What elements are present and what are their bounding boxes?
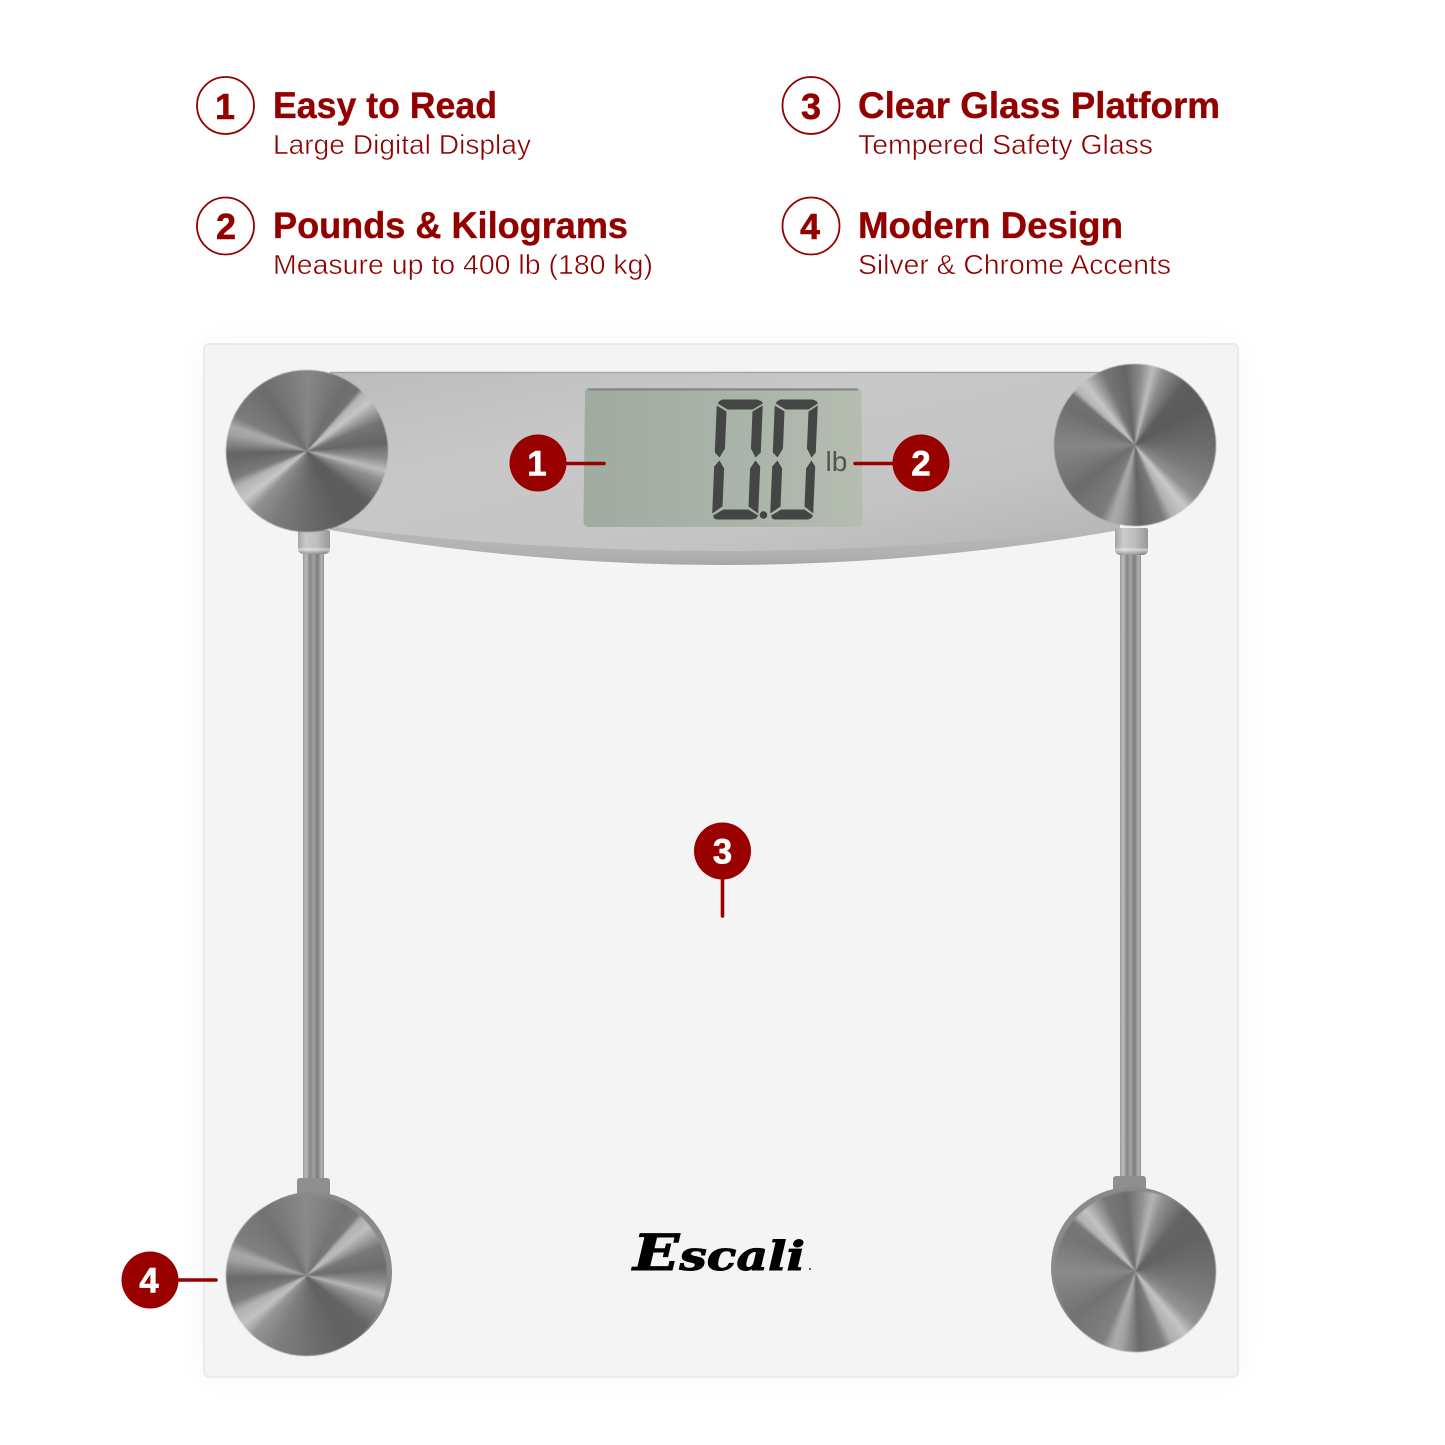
legend item 1: Easy to Read: Large Digital Display: [273, 129, 531, 160]
callout 1: [510, 434, 604, 492]
callout 4: [122, 1252, 216, 1308]
callout 3: 3: [713, 832, 732, 872]
legend item 1: Easy to Read: 1: [215, 86, 235, 127]
legend item 2: Pounds & Kilograms: 2: [216, 206, 236, 247]
legend item 2: Pounds & Kilograms: Pounds & Kilograms: [273, 205, 628, 246]
legend item 4: Modern Design: 4: [800, 206, 820, 247]
foot: bottom right: [1051, 1187, 1212, 1348]
panel: silver display housing: [330, 372, 1120, 565]
callout 1: 1: [527, 444, 547, 484]
bottom-left rod collar: [297, 1178, 330, 1196]
legend item 2: Pounds & Kilograms: Measure up to 400 lb (180 kg): [273, 249, 653, 280]
callout 2: [855, 434, 950, 492]
legend item 2: Pounds & Kilograms: [197, 198, 653, 280]
bottom-right rod collar: [1113, 1176, 1146, 1194]
legend item 1: Easy to Read: [197, 77, 531, 160]
legend item 3: Clear Glass Platform: [782, 77, 1220, 160]
left support rod: [303, 552, 324, 1182]
panel: feature legend: [196, 76, 1220, 280]
lcd unit label: lb: [826, 446, 847, 477]
callout 2: 2: [911, 444, 931, 484]
bottom left foot face: [226, 1195, 387, 1356]
legend item 4: Modern Design: [782, 198, 1171, 280]
legend item 3: Clear Glass Platform: Tempered Safety Glass: [858, 129, 1153, 160]
panel: glass scale platform: [203, 343, 1239, 1378]
legend item 1: Easy to Read: Easy to Read: [273, 85, 497, 126]
brand logo: Escali: [631, 1223, 805, 1282]
foot: top left: [226, 370, 388, 532]
legend item 4: Modern Design: Silver & Chrome Accents: [858, 249, 1171, 280]
foot: top right: [1054, 364, 1216, 526]
legend item 3: Clear Glass Platform: Clear Glass Platform: [858, 85, 1220, 126]
callout 4: 4: [139, 1262, 159, 1300]
lcd reading 0.0 as seven-segment drawing: [712, 400, 818, 520]
legend item 3: Clear Glass Platform: 3: [801, 86, 821, 127]
top-left rod collar: [298, 530, 330, 554]
callout 3: [694, 822, 751, 916]
top-right rod collar: [1115, 528, 1148, 555]
right support rod: [1120, 552, 1141, 1182]
bottom right foot face: [1055, 1191, 1216, 1352]
lcd display: [584, 388, 862, 527]
foot: bottom left: [231, 1192, 392, 1353]
legend item 4: Modern Design: Modern Design: [858, 205, 1123, 246]
